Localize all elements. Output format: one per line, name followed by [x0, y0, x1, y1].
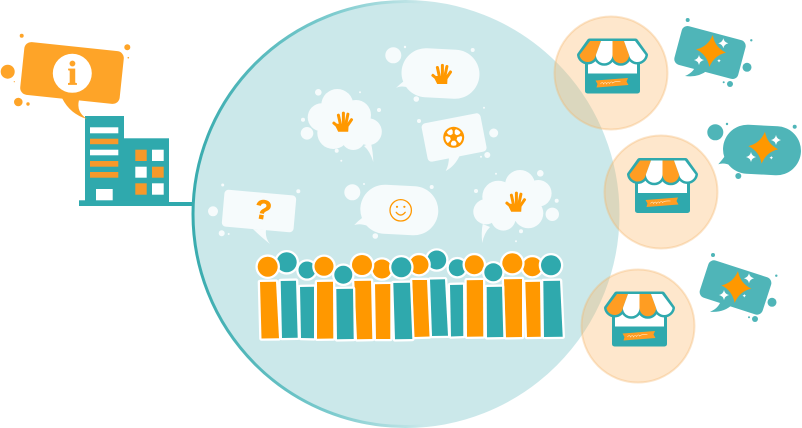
- star review bubble 1: [673, 18, 752, 87]
- icon: company building: [79, 116, 169, 206]
- person front row: [391, 257, 412, 339]
- shop circle 3: [582, 270, 694, 382]
- speech bubble: football: [417, 107, 498, 171]
- person front row: [258, 257, 279, 338]
- shop circle 2: [604, 136, 718, 248]
- person front row: [352, 255, 372, 339]
- question mark: ?: [252, 194, 274, 226]
- person front row: [541, 255, 563, 337]
- person back row: [427, 250, 448, 336]
- icon: football: [443, 127, 464, 148]
- speech bubble: question: [208, 184, 300, 244]
- person middle row: [523, 257, 542, 337]
- person front row: [484, 263, 503, 337]
- community circle: [193, 2, 618, 426]
- speech bubble: smile: [344, 183, 440, 239]
- crowd of people: [258, 250, 563, 339]
- person back row: [277, 252, 298, 338]
- connector line: [165, 202, 197, 206]
- person middle row: [372, 260, 392, 339]
- info letter: i: [68, 56, 77, 92]
- icon: smiley: [390, 200, 411, 221]
- person front row: [502, 253, 522, 337]
- speech bubble: hand pill: [385, 46, 481, 102]
- thought cloud: hand left: [301, 89, 382, 162]
- star review bubble 2: [707, 123, 802, 179]
- info speech bubble: [1, 34, 130, 119]
- person back row: [449, 259, 466, 336]
- star review bubble 3: [698, 253, 778, 322]
- shop circle 1: [554, 16, 668, 130]
- person middle row: [410, 255, 430, 337]
- thought cloud: hand right: [473, 170, 559, 243]
- person back row: [298, 262, 316, 338]
- person front row: [465, 255, 484, 337]
- person front row: [334, 266, 354, 339]
- person front row: [314, 257, 334, 339]
